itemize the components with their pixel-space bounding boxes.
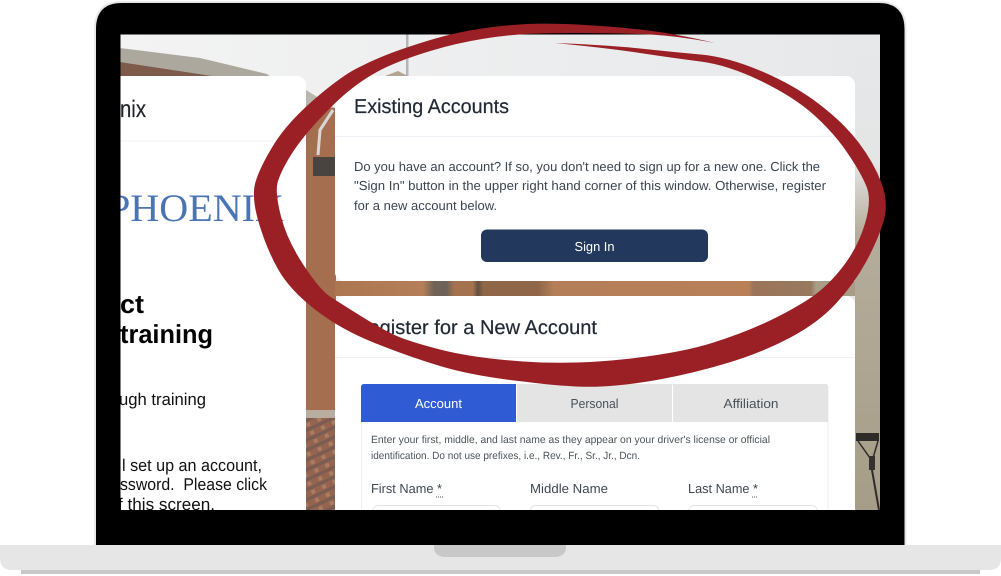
lamp post — [856, 433, 879, 510]
form tabs: Affiliation — [724, 396, 778, 411]
panel: Existing Accounts card — [335, 76, 855, 281]
laptop base — [0, 545, 1001, 574]
form labels — [372, 484, 758, 498]
form labels: Last Name * — [688, 481, 758, 496]
logo wordmark: PHOENIX — [108, 187, 284, 230]
left body text: l set up an account, — [122, 456, 262, 475]
left body text — [118, 390, 267, 514]
heading: Register for a New Account: Register for a New Account — [354, 317, 597, 339]
heading: Phoenix fragment: nix — [120, 96, 146, 123]
form tabs: Personal — [570, 396, 619, 411]
screen contents — [90, 34, 880, 536]
form instructions: identification. Do not use prefixes, i.e., Rev., Fr., Sr., Jr., Dcn. — [371, 450, 640, 462]
left heading: ct — [120, 289, 144, 319]
form tabs: Account — [415, 396, 462, 411]
left heading — [120, 296, 212, 348]
account explanation text: Do you have an account? If so, you don't need to sign up for a new one. Click the — [354, 159, 820, 174]
heading: Existing Accounts: Existing Accounts — [354, 96, 509, 118]
laptop lid — [95, 2, 906, 546]
background photo of building — [120, 34, 880, 510]
form tabs — [361, 384, 828, 510]
panel: left welcome card — [120, 76, 306, 510]
left heading: training — [120, 319, 213, 349]
panel: Register card — [335, 296, 855, 510]
account explanation text: for a new account below. — [354, 198, 497, 213]
Sign In button — [481, 230, 708, 262]
account explanation text: "Sign In" button in the upper right hand corner of this window. Otherwise, register — [354, 178, 827, 193]
left body text: ugh training — [119, 390, 206, 409]
form instructions: Enter your first, middle, and last name as they appear on your driver's license or official — [371, 434, 770, 446]
left body text: f this screen. — [118, 495, 215, 514]
account explanation text — [354, 159, 827, 213]
red hand-drawn ellipse highlight — [254, 24, 886, 387]
Sign In button: Sign In — [574, 239, 614, 254]
form labels: First Name * — [371, 481, 442, 496]
left body text: ssword. Please click — [120, 475, 267, 494]
form instructions — [371, 434, 770, 462]
form labels: Middle Name — [530, 481, 608, 496]
form inputs — [372, 505, 818, 510]
